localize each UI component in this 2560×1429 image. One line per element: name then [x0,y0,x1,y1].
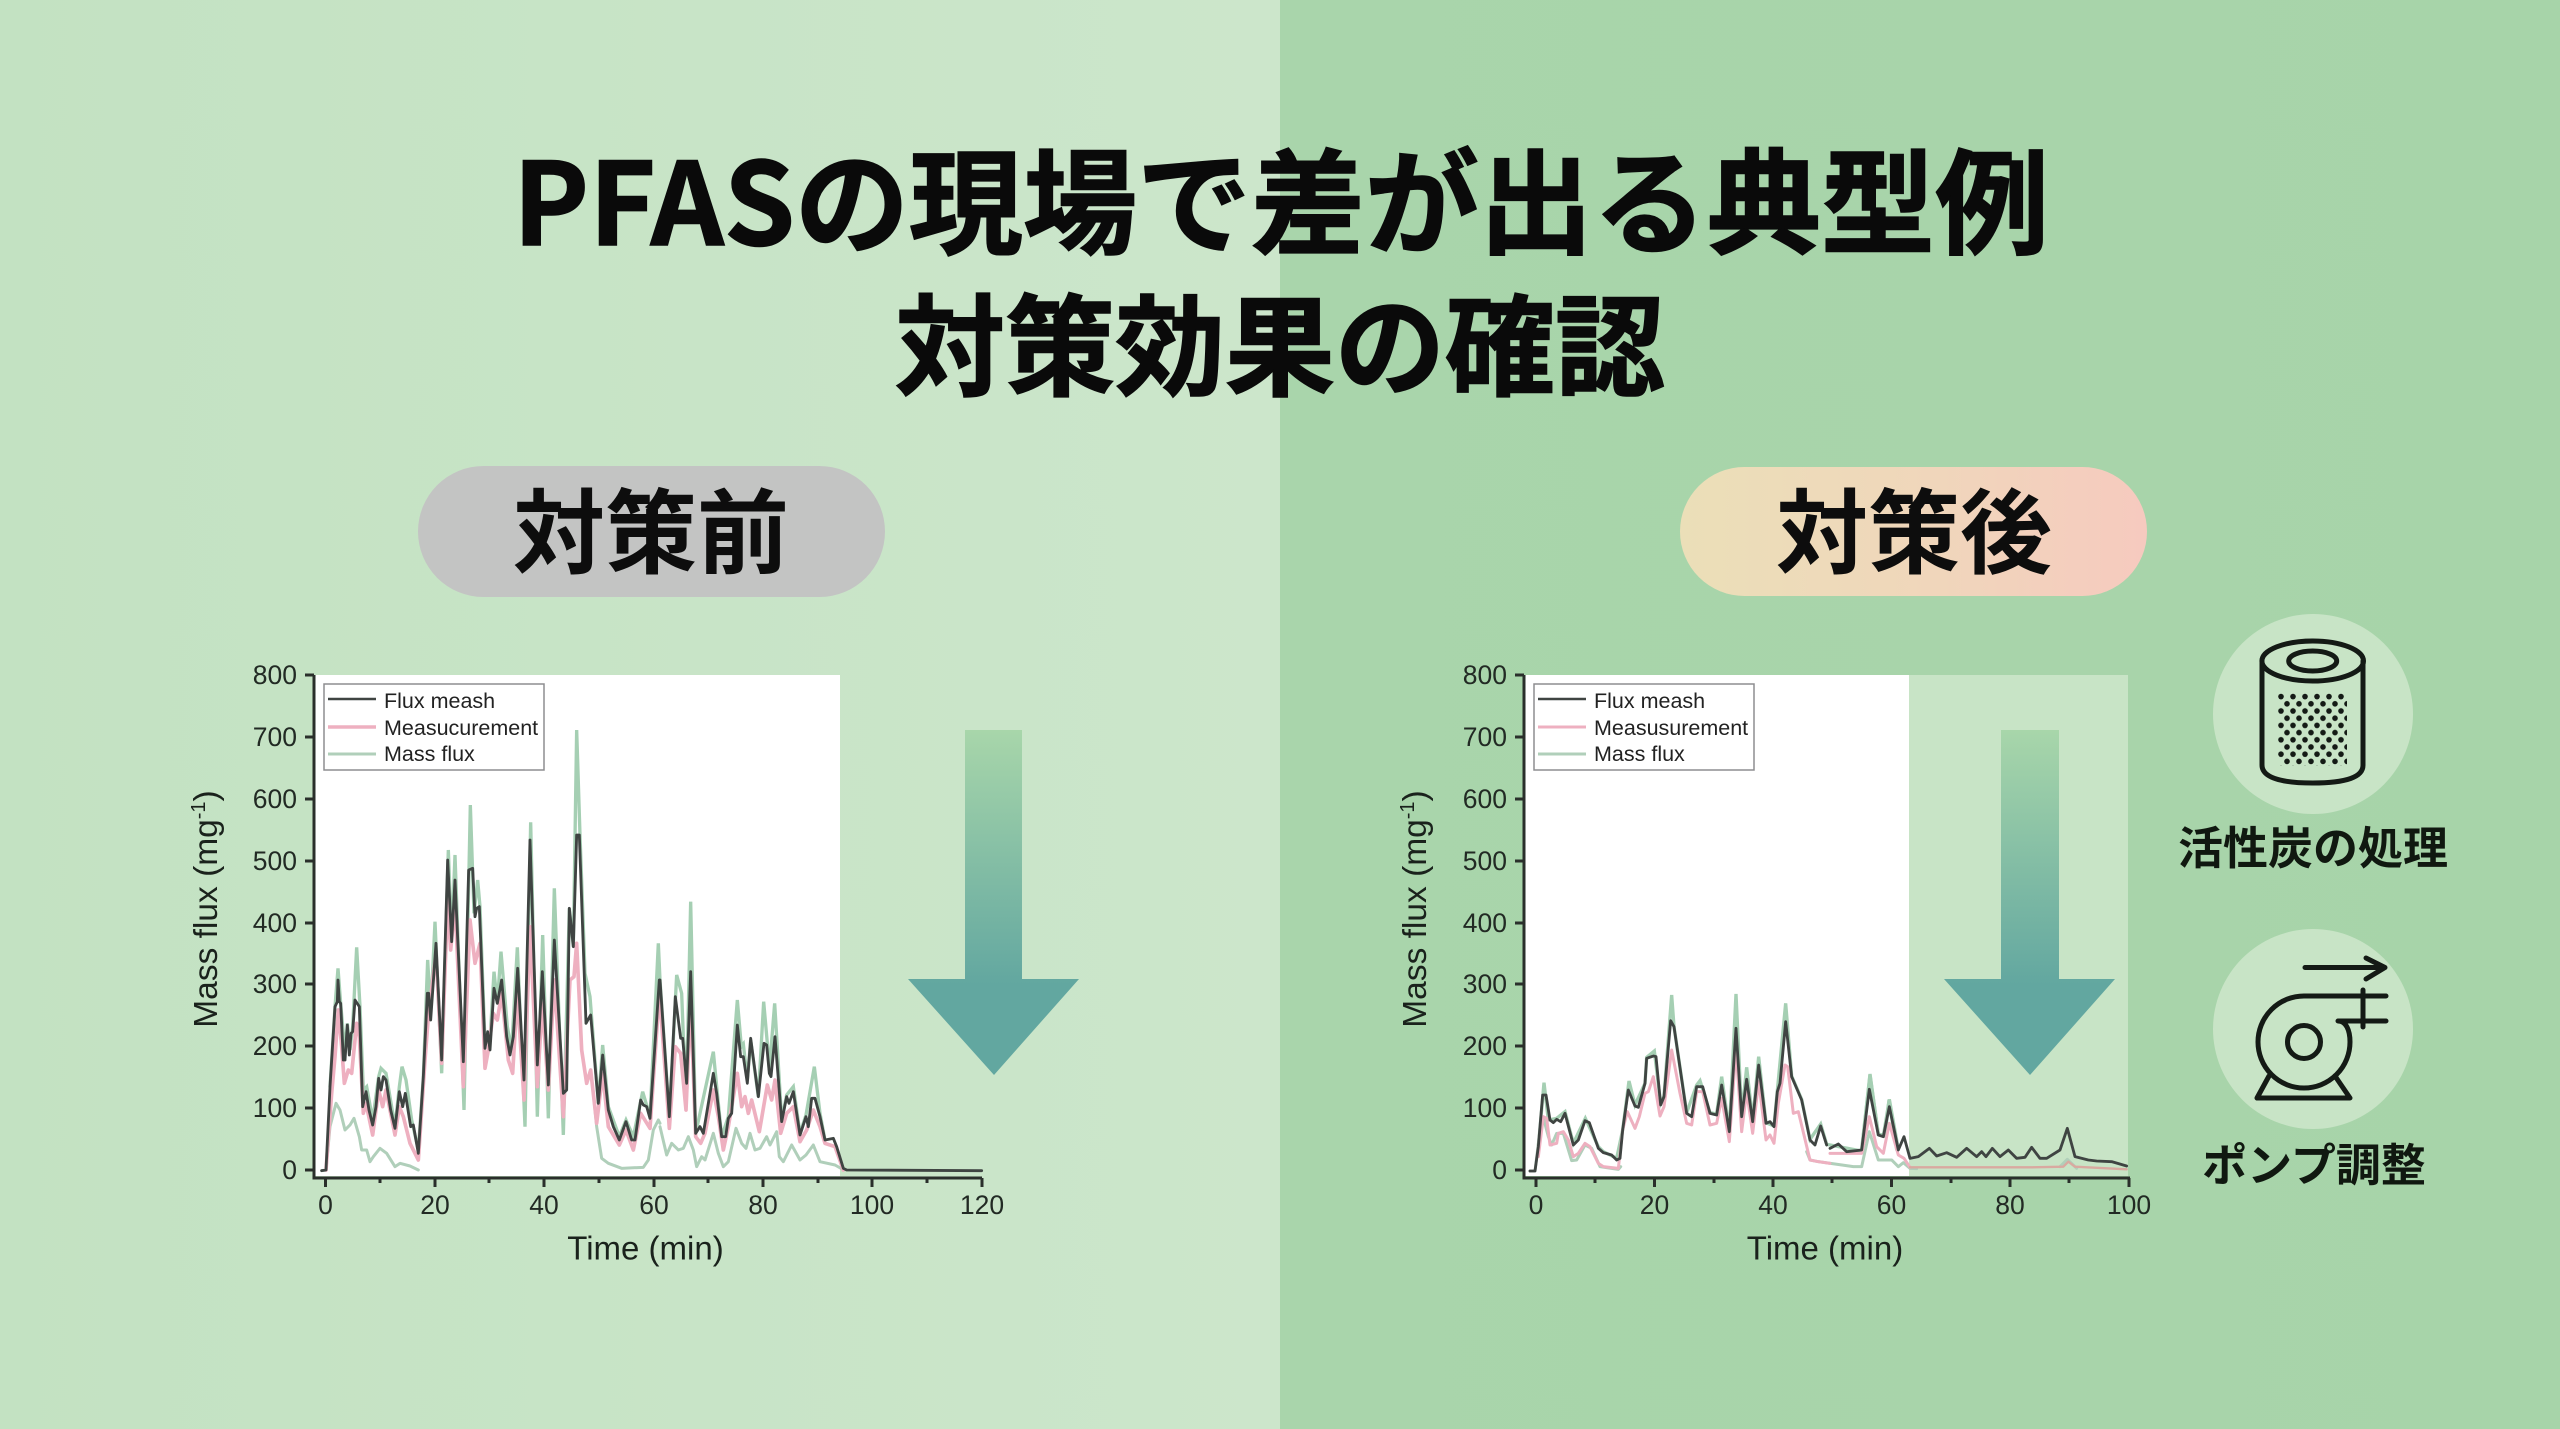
legend: Flux meash [1594,689,1705,713]
y axis labels: 500 [1463,846,1507,876]
y axis labels: 800 [1463,660,1507,690]
y axis labels: 600 [253,784,297,814]
y axis title: Mass flux (mg [1397,819,1434,1028]
x axis labels: 60 [1877,1190,1906,1220]
y axis labels: 0 [1492,1155,1507,1185]
icon: activated carbon filter [2213,614,2413,814]
y axis labels: 0 [282,1155,297,1185]
y axis labels: 600 [1463,784,1507,814]
x axis title: Time (min) [567,1230,724,1266]
chart: after countermeasure [1397,660,2151,1266]
x axis labels: 120 [960,1190,1004,1220]
x axis labels: 20 [1640,1190,1669,1220]
y axis labels: 100 [253,1093,297,1123]
x axis labels: 60 [639,1190,669,1220]
y axis title: -1 [188,801,210,819]
x axis labels: 0 [1529,1190,1543,1220]
title [513,113,2049,419]
chart: before countermeasure [188,660,1004,1266]
y axis title: ) [1397,790,1434,801]
y axis labels: 300 [1463,969,1507,999]
plot area [315,675,840,1176]
x axis title: Time (min) [1747,1230,1903,1266]
y axis labels [1463,660,1507,1185]
series: mass flux lower curve [322,1093,843,1171]
y axis labels: 400 [1463,908,1507,938]
icon: pump [2213,929,2413,1129]
series: measurement [326,900,843,1170]
legend: Mass flux [1594,742,1685,766]
badge: before countermeasure [418,460,885,597]
y axis title: Mass flux (mg [188,819,225,1028]
series: flux mesh [1530,1021,2127,1171]
arrow: before panel downward [908,730,1079,1075]
legend: Measusurement [1594,716,1748,740]
series: mass flux upper spikes [1538,994,1898,1158]
y axis labels: 200 [253,1031,297,1061]
y axis labels: 400 [253,908,297,938]
x axis labels: 80 [1995,1190,2025,1220]
x axis labels: 80 [748,1190,778,1220]
y axis labels: 800 [253,660,297,690]
x axis labels: 0 [318,1190,333,1220]
axes and ticks [1515,675,2130,1187]
y axis labels [253,660,297,1185]
legend [1534,684,1754,770]
y axis labels: 500 [253,846,297,876]
y axis labels: 200 [1463,1031,1507,1061]
x axis labels [318,1190,1004,1220]
y axis labels: 700 [253,722,297,752]
legend: Measucurement [384,716,538,740]
plot area [1525,675,1909,1176]
panel: right background [1280,0,2560,1429]
legend [324,684,544,770]
y axis labels: 100 [1463,1093,1507,1123]
axes and ticks [305,675,982,1187]
x axis labels: 20 [420,1190,450,1220]
badge: before countermeasure: 対策前 [513,460,789,593]
series: measurement [1538,1048,2127,1169]
series: mass flux upper spikes [330,730,825,1150]
x axis labels: 40 [1758,1190,1788,1220]
series: mass flux lower curve [1530,1120,2077,1171]
panel: left background [0,0,1280,1429]
x axis labels: 100 [2107,1190,2151,1220]
x axis labels [1529,1190,2151,1220]
label: activated carbon treatment: 活性炭の処理 [2178,812,2448,877]
series: flux mesh [322,835,982,1171]
y axis title: ) [188,790,225,801]
highlighted after-treatment region [1909,675,2128,1176]
badge: after countermeasure: 対策後 [1776,460,2052,593]
legend: Flux meash [384,689,495,713]
badge: after countermeasure [1680,460,2147,596]
legend: Mass flux [384,742,475,766]
y axis labels: 300 [253,969,297,999]
label: pump adjustment: ポンプ調整 [2202,1129,2426,1194]
title: 対策効果の確認 [895,259,1665,419]
title: PFASの現場で差が出る典型例 [513,113,2049,278]
x axis labels: 100 [850,1190,894,1220]
x axis labels: 40 [529,1190,559,1220]
y axis title: -1 [1397,801,1419,819]
y axis labels: 700 [1463,722,1507,752]
arrow: after panel downward [1944,730,2115,1075]
